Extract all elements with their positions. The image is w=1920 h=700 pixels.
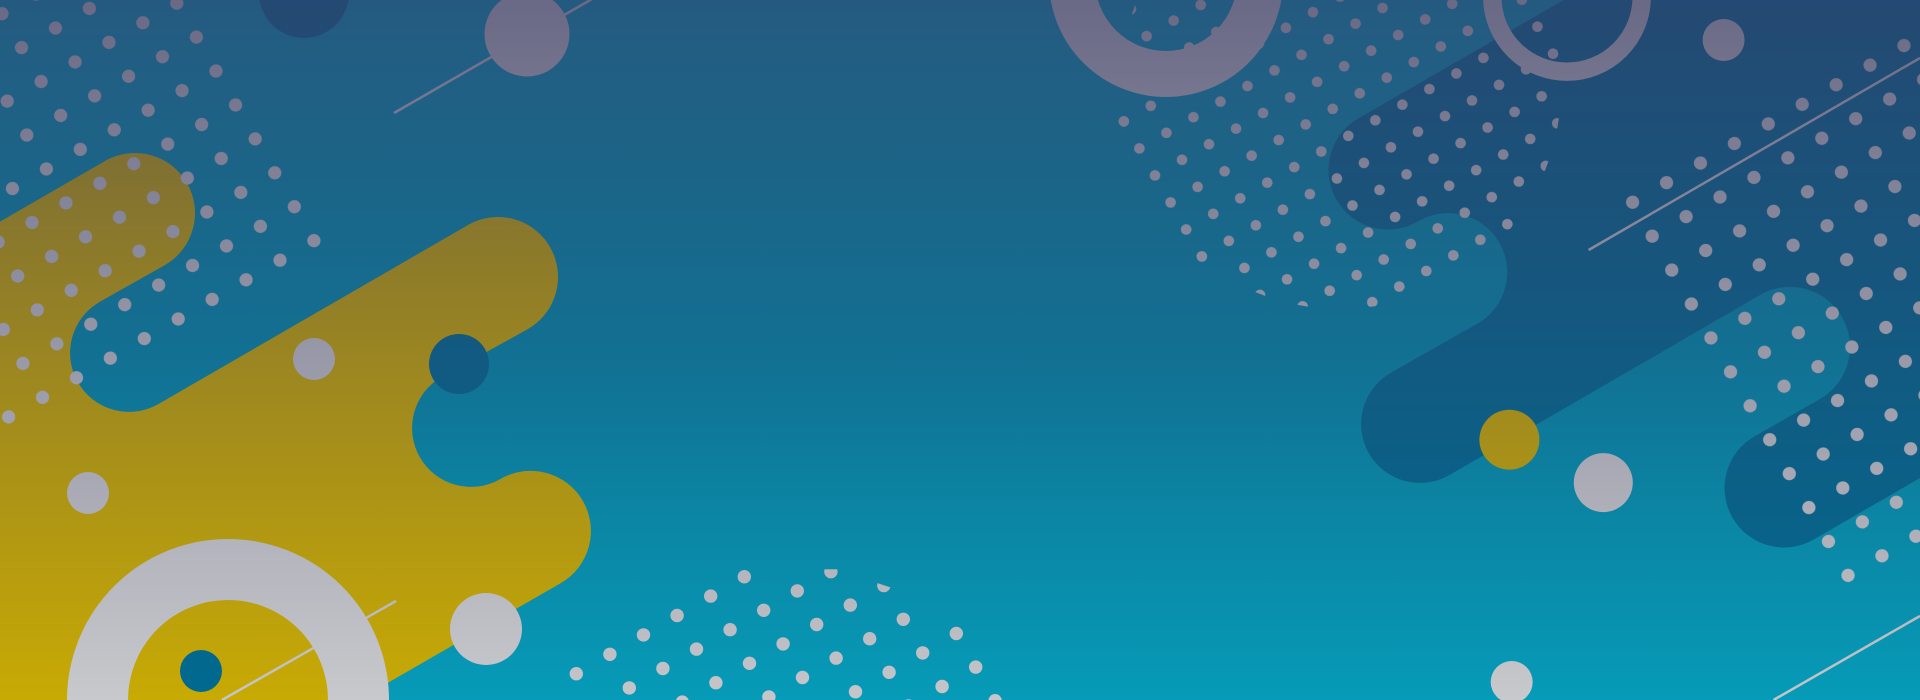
circle: large grey lower left (450, 593, 522, 665)
dot grid: right (1606, 0, 1920, 602)
blue circle: top left (259, 0, 349, 38)
circle: small grey top right (1703, 19, 1745, 61)
ring: small top right (1492, 0, 1642, 72)
ring: large top centre (1072, 0, 1260, 74)
circle: grey on gold (293, 338, 335, 380)
circle: grey right middle (1574, 453, 1633, 512)
circle: top left grey (484, 0, 570, 76)
line: lower left diagonal (222, 601, 396, 700)
circle: grey lower left (67, 472, 109, 514)
blob: gold rounded shape (0, 153, 591, 700)
circle: blue inside ring (180, 650, 222, 692)
circle: grey bottom (1491, 661, 1533, 700)
blob: dark blue rounded shape (1329, 0, 1920, 547)
dot grid: left (0, 0, 341, 659)
dot cluster: bottom centre (570, 569, 1002, 700)
line: upper right diagonal (1589, 58, 1920, 250)
circle: gold on blue shape (1479, 410, 1539, 470)
ring: lower left (98, 570, 358, 700)
circle: blue on gold edge (429, 334, 489, 394)
line: lower right diagonal (1774, 616, 1920, 700)
line: top left diagonal (394, 0, 592, 113)
dot cluster: top right circular (1118, 0, 1559, 307)
